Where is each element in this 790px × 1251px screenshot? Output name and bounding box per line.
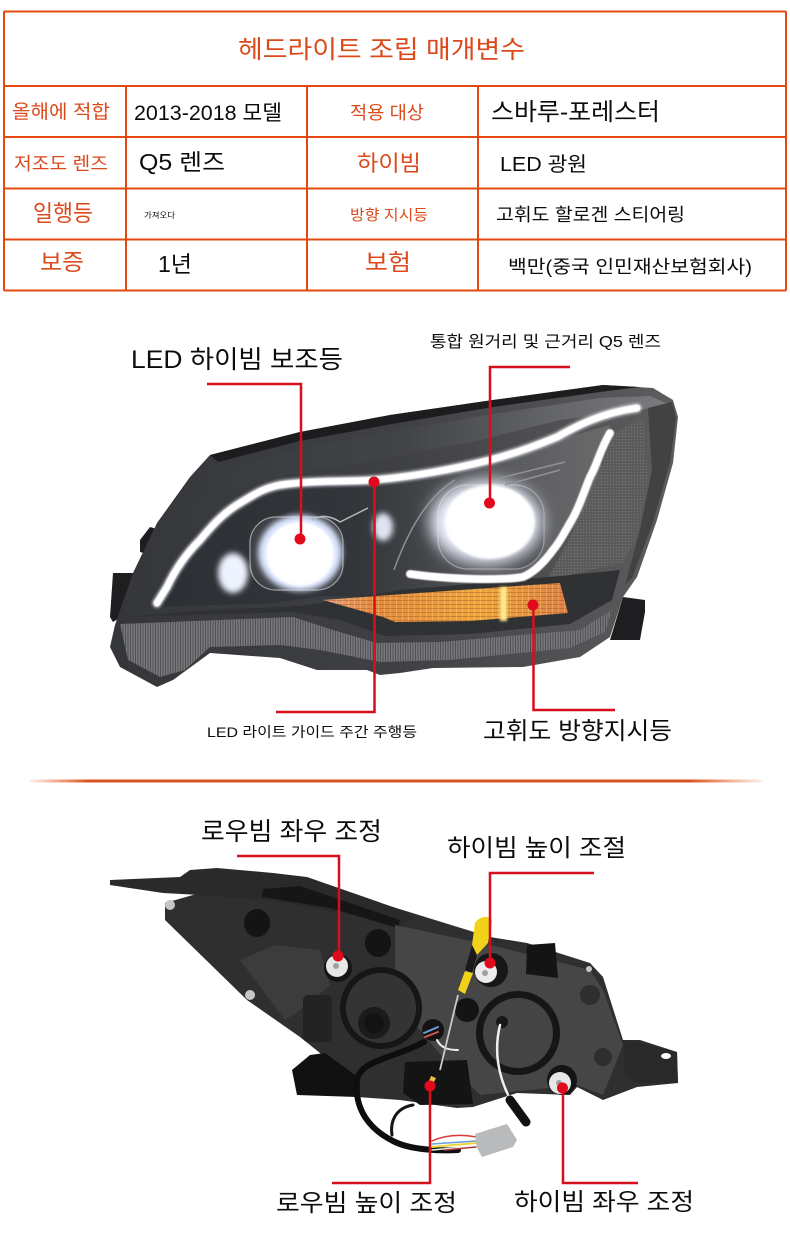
lower left connector block — [292, 1053, 357, 1097]
dark band below lens — [122, 570, 620, 636]
callout: LED light guide DRL — [207, 476, 417, 740]
row 2: 하이빔 — [357, 151, 421, 176]
row 3: 고휘도 할로겐 스티어링 — [496, 205, 685, 225]
callout: low beam height adjust — [276, 1080, 457, 1217]
callout: high beam height adjust — [447, 835, 626, 968]
row 3 — [33, 200, 685, 226]
leader line — [237, 856, 339, 956]
row 1: 올해에 적합 — [12, 101, 110, 123]
amber turn signal — [323, 583, 568, 622]
mounting brackets — [110, 527, 645, 640]
row 1: 2013-2018 모델 — [134, 102, 282, 125]
wiring harness — [357, 1019, 526, 1150]
rear body — [165, 890, 678, 1108]
row 4 — [40, 249, 752, 277]
right rim — [625, 402, 676, 585]
leader line — [563, 1088, 638, 1183]
row 3: 방향 지시등 — [350, 207, 428, 224]
label: LED 라이트 가이드 주간 주행등 — [207, 724, 417, 740]
rear headlight photo — [110, 868, 678, 1157]
label: 하이빔 높이 조절 — [447, 835, 626, 862]
top flange — [110, 868, 415, 927]
top black edge — [210, 385, 640, 462]
leader line — [276, 482, 374, 712]
rubber plugs and clip — [244, 909, 612, 1105]
row 1: 적용 대상 — [350, 103, 424, 123]
label: 하이빔 좌우 조정 — [514, 1189, 694, 1216]
row 2: 저조도 렌즈 — [14, 154, 108, 174]
leader line — [534, 605, 615, 710]
outer housing — [110, 385, 678, 687]
row 1 — [12, 99, 660, 126]
adjuster left — [324, 954, 352, 982]
side mesh — [547, 418, 648, 580]
left shaded panel — [240, 945, 330, 1020]
row 4: 1년 — [158, 251, 192, 277]
adjuster lower right — [547, 1065, 577, 1095]
upper lens band — [145, 396, 668, 602]
section divider — [30, 780, 762, 782]
label: 고휘도 방향지시등 — [483, 718, 672, 745]
parameter table — [4, 12, 786, 291]
row 3: 일행등 — [33, 200, 93, 226]
grey connector — [475, 1124, 517, 1157]
lens interior — [155, 425, 610, 607]
daytime running light — [157, 408, 637, 603]
callout: low beam horizontal adjust — [201, 818, 382, 962]
bulb cap right — [476, 991, 560, 1075]
label: 통합 원거리 및 근거리 Q5 렌즈 — [430, 333, 661, 351]
lighter centre panel — [395, 925, 623, 1095]
row 2 — [14, 149, 587, 176]
tab hole — [661, 1053, 671, 1059]
row 4: 보증 — [40, 249, 84, 275]
front headlight photo — [110, 385, 678, 687]
row 2: Q5 렌즈 — [139, 149, 225, 175]
row 4: 백만(중국 인민재산보험회사) — [508, 257, 752, 277]
row 3: 가져오다 — [144, 211, 176, 220]
label: 로우빔 높이 조정 — [276, 1190, 457, 1217]
callout: high brightness turn signal — [483, 600, 672, 745]
screws — [165, 900, 592, 1000]
screwdriver — [429, 917, 492, 1082]
leader line — [207, 384, 301, 538]
bulb cap left — [340, 967, 422, 1049]
label: LED 하이빔 보조등 — [131, 346, 343, 374]
leader line — [332, 1086, 430, 1183]
flange shadow — [262, 886, 400, 928]
row 1: 스바루-포레스터 — [491, 99, 660, 126]
leader line — [490, 367, 570, 503]
rear mounting tab — [623, 1040, 678, 1083]
right projector — [394, 462, 565, 570]
row 4: 보험 — [365, 249, 411, 275]
callout: high beam horizontal adjust — [514, 1082, 694, 1216]
callout: integrated Q5 lens — [430, 333, 661, 508]
table grid — [4, 12, 786, 291]
label: 로우빔 좌우 조정 — [201, 818, 382, 846]
leader line — [490, 873, 594, 963]
left projector — [218, 508, 393, 593]
lower ribbed strip — [120, 610, 612, 677]
table title: 헤드라이트 조립 매개변수 — [238, 36, 525, 64]
row 2: LED 광원 — [500, 153, 587, 176]
adjuster top right — [474, 953, 508, 987]
callout: LED high beam auxiliary — [131, 346, 343, 544]
